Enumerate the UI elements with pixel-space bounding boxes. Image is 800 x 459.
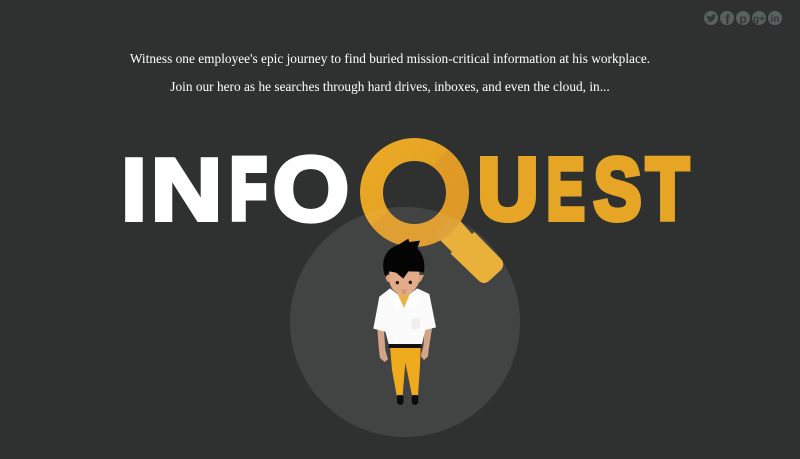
logo word: UEST: T: [646, 141, 689, 238]
logo word: INFO: I: [121, 141, 147, 240]
eyes: [396, 281, 412, 284]
logo word: UEST: [478, 140, 689, 238]
ears: [384, 275, 424, 283]
neck: [397, 293, 410, 308]
hero character: [373, 239, 436, 405]
logo word: INFO: F: [231, 144, 266, 237]
face: [389, 268, 419, 296]
spotlight circle: [290, 207, 520, 437]
collar: [387, 288, 421, 310]
logo word: UEST: E: [547, 140, 585, 238]
left arm: [377, 329, 388, 362]
social glyphs: p: [739, 12, 747, 26]
right arm: [421, 328, 432, 360]
magnifier ring: [372, 150, 458, 236]
icon: twitter: [706, 14, 716, 22]
logo word: INFO: [121, 139, 349, 241]
social glyphs: in: [771, 14, 779, 25]
trousers: [390, 347, 421, 395]
magnifier handle: [434, 215, 503, 283]
social glyphs: g+: [753, 14, 765, 25]
logo word: UEST: U: [478, 141, 538, 238]
shirt: [373, 288, 436, 344]
intro text line 2: Join our hero as he searches through hard drives, inboxes, and even the cloud, in...: [170, 79, 610, 94]
belt: [389, 344, 421, 348]
social icons: [704, 11, 782, 27]
logo word: INFO: N: [151, 140, 222, 239]
illustration: logo, spotlight and hero: [125, 138, 690, 437]
nose shadow: [401, 289, 407, 294]
logo word: INFO: O: [273, 139, 349, 241]
shirt pocket: [412, 318, 420, 329]
magnifying glass Q: [360, 138, 503, 283]
intro text line 1: Witness one employee's epic journey to find buried mission-critical information at his workplace.: [130, 51, 650, 66]
shoes: [397, 395, 418, 405]
social glyphs: [725, 11, 779, 27]
logo word: UEST: S: [594, 140, 641, 238]
spotlight tint over the magnifier: [365, 208, 503, 283]
hair: [383, 239, 424, 279]
social glyphs: f: [725, 11, 730, 27]
